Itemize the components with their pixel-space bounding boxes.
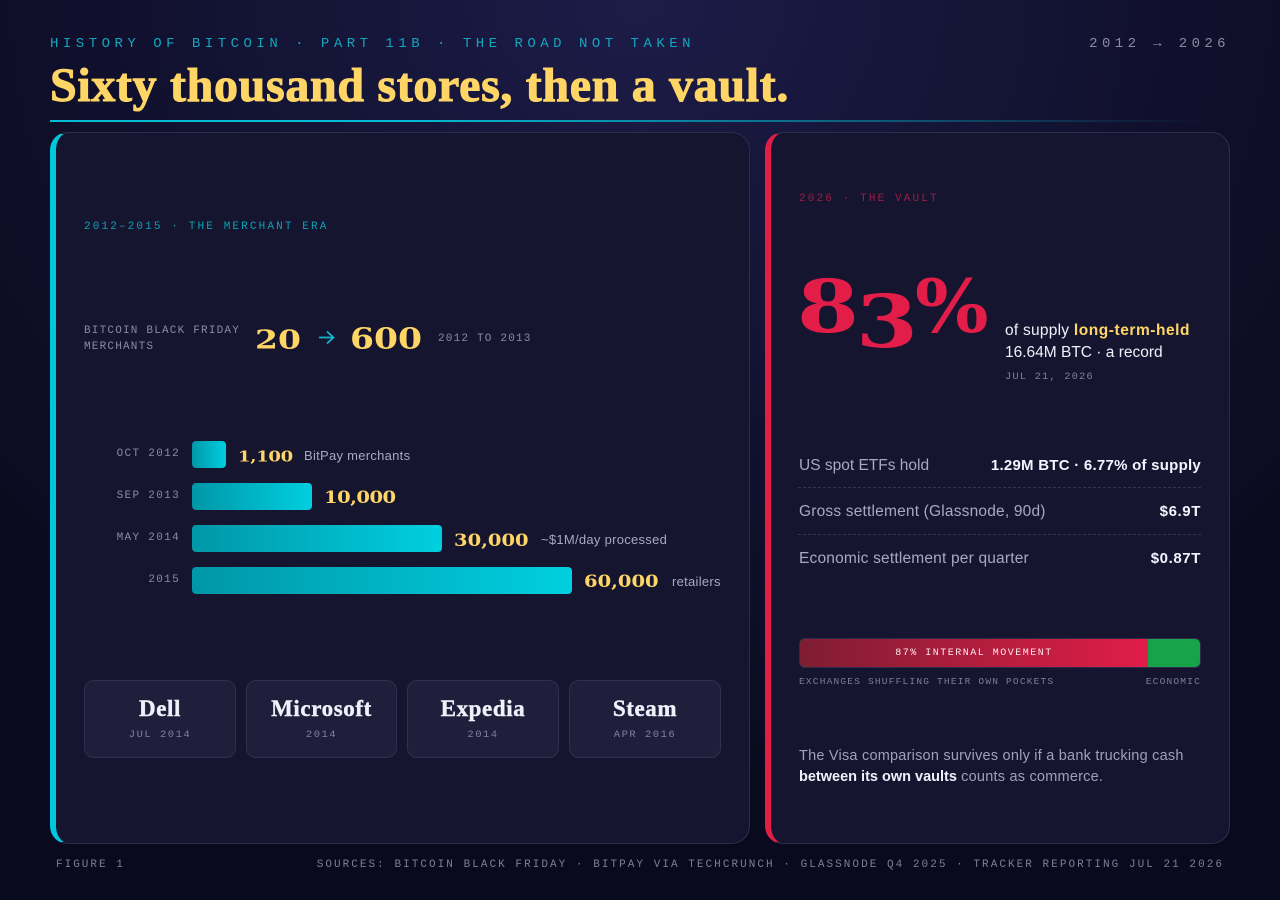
card: Dell: Dell [139, 696, 181, 721]
card: Steam: APR 2016 [614, 729, 676, 741]
stat label: BITCOIN BLACK FRIDAY [84, 325, 240, 337]
stat rows: $6.9T [1160, 503, 1201, 520]
internal movement segment: 87% INTERNAL MOVEMENT [895, 648, 1053, 659]
stat rows: 1.29M BTC · 6.77% of supply [991, 457, 1201, 474]
bar row: May 2014 [117, 525, 667, 552]
row: gross settlement: Gross settlement (Glassnode, 90d) [799, 503, 1046, 520]
big number: 8 [797, 263, 859, 349]
bar row: 2015: 2015 [148, 574, 180, 586]
stat start value: 20 [255, 324, 301, 355]
stat label [84, 325, 240, 353]
big number date: JUL 21, 2026 [1005, 371, 1094, 383]
card: Microsoft [246, 680, 397, 758]
bar row: Oct 2012: 1,100 [238, 448, 293, 466]
big number [797, 263, 989, 364]
stat rows: $0.87T [1151, 550, 1201, 567]
date range: 2012 → 2026 [1089, 36, 1230, 52]
arrow [319, 330, 335, 344]
row: ETF holdings: US spot ETFs hold [799, 457, 929, 474]
bar row: Sep 2013: SEP 2013 [117, 490, 180, 502]
card: Steam: Steam [613, 696, 677, 721]
panel label: 2012–2015 · THE MERCHANT ERA [84, 221, 328, 233]
card: Dell [84, 680, 236, 758]
bar row: Sep 2013: 10,000 [324, 488, 396, 507]
stat end value: 600 [350, 322, 422, 356]
big number: % [915, 263, 989, 349]
bar row: May 2014: MAY 2014 [117, 532, 180, 544]
header rule [50, 120, 1230, 122]
card: Steam [569, 680, 721, 758]
big number: 3 [856, 278, 918, 364]
stacked bar: internal vs economic [799, 638, 1201, 668]
footer: figure label: FIGURE 1 [56, 859, 125, 871]
card: Microsoft: Microsoft [271, 696, 372, 721]
card: Microsoft: 2014 [306, 729, 337, 741]
big number caption: of supply long-term-held [1005, 322, 1190, 339]
closing note [799, 748, 1184, 785]
stat label: MERCHANTS [84, 341, 154, 353]
bar row: May 2014: 30,000 [454, 531, 529, 550]
stat range: 2012 TO 2013 [438, 333, 532, 345]
bar row: Sep 2013 [117, 483, 396, 510]
big number caption: 16.64M BTC · a record [1005, 344, 1163, 361]
bar row: Oct 2012 [117, 441, 410, 468]
bar chart: merchant counts [117, 441, 721, 594]
eyebrow: series title: HISTORY OF BITCOIN · PART 11B · THE ROAD NOT TAKEN [50, 36, 695, 52]
closing note: between its own vaults counts as commerce. [799, 769, 1103, 785]
card: Expedia: Expedia [441, 696, 525, 721]
big number caption [1005, 322, 1190, 361]
bar row: Oct 2012: BitPay merchants [304, 448, 410, 463]
bar row: May 2014: ~$1M/day processed [541, 532, 667, 547]
footer: sources: SOURCES: BITCOIN BLACK FRIDAY · BITPAY VIA TECHCRUNCH · GLASSNODE Q4 2025 · TRACKER REPORTING JUL 21 2026 [317, 859, 1224, 871]
card: Expedia [407, 680, 559, 758]
row: economic settlement: Economic settlement per quarter [799, 550, 1029, 567]
panel label: 2026 · THE VAULT [799, 193, 939, 205]
panel: the merchant era [50, 132, 750, 844]
bar row: Oct 2012: OCT 2012 [117, 448, 180, 460]
bar caption left: EXCHANGES SHUFFLING THEIR OWN POCKETS [799, 676, 1054, 687]
bar row: 2015: retailers [672, 574, 721, 589]
title: Sixty thousand stores, then a vault. [50, 59, 789, 112]
bar row: 2015: 60,000 [584, 572, 659, 591]
stat rows [798, 457, 1201, 567]
card: Expedia: 2014 [467, 729, 499, 741]
stat: Black Friday merchants [84, 322, 532, 356]
closing note: The Visa comparison survives only if a bank trucking cash [799, 748, 1184, 764]
bar caption right: ECONOMIC [1146, 676, 1201, 687]
panel: the vault [765, 132, 1230, 844]
bar row: 2015 [148, 567, 721, 594]
card: Dell: JUL 2014 [129, 729, 191, 741]
internal movement segment [800, 639, 1148, 667]
